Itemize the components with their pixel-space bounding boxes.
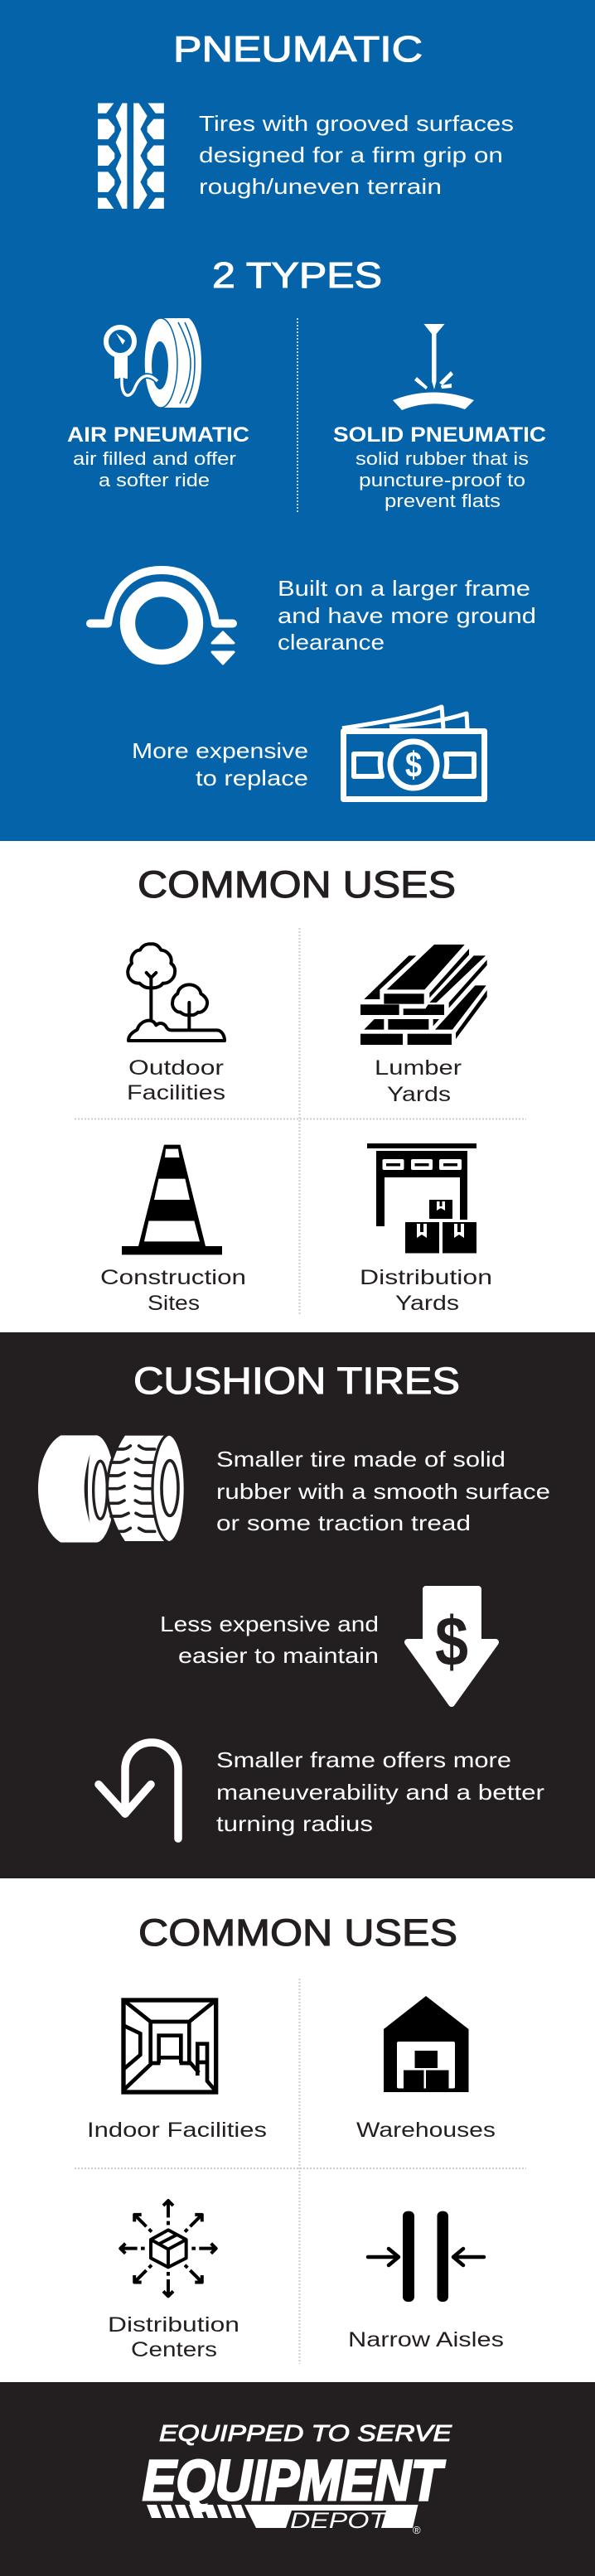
- label: outdoor facilities: Facilities: [127, 1081, 225, 1104]
- text: smaller tire: or some traction tread: [216, 1510, 471, 1535]
- text: built on a larger frame: clearance: [278, 630, 385, 655]
- text: smaller tire: Smaller tire made of solid: [216, 1447, 506, 1472]
- text: more expensive to replace: [132, 738, 308, 790]
- icon: ground clearance: [90, 570, 234, 665]
- tagline: EQUIPPED TO SERVE: [159, 2420, 452, 2446]
- icon: tire tread: [98, 103, 164, 209]
- icon: dollar down arrow: $: [435, 1602, 468, 1680]
- label: distribution yards: [360, 1266, 492, 1315]
- label: solid pneumatic: prevent flats: [385, 491, 501, 511]
- label: air pneumatic: a softer ride: [99, 470, 210, 491]
- label: construction sites: [100, 1266, 246, 1315]
- label: solid pneumatic: SOLID PNEUMATIC: [333, 423, 546, 447]
- label: distribution centers: Distribution: [108, 2313, 239, 2337]
- icon: lumber: [360, 945, 487, 1045]
- label: outdoor facilities: [127, 1056, 225, 1104]
- text: smaller frame: turning radius: [216, 1811, 373, 1836]
- icon: warehouse: [384, 1996, 469, 2092]
- icon: distribution yard: [367, 1143, 476, 1253]
- label: construction sites: Sites: [148, 1292, 200, 1315]
- text: built on a larger frame: [278, 576, 536, 655]
- label: lumber yards: [375, 1056, 462, 1106]
- label: solid pneumatic: solid rubber that is: [356, 448, 529, 469]
- label: air pneumatic: [67, 423, 249, 491]
- label: solid pneumatic: puncture-proof to: [359, 470, 525, 491]
- text: tires with grooved surfaces: Tires with grooved surfaces: [199, 111, 514, 136]
- logo: equipment depot: EQUIPMENT: [143, 2448, 445, 2512]
- logo: equipment depot: ®: [413, 2524, 421, 2536]
- text: smaller frame: [216, 1747, 544, 1836]
- label: distribution yards: Distribution: [360, 1266, 492, 1289]
- heading: common uses: COMMON USES: [138, 863, 456, 906]
- text: more expensive to replace: More expensive: [132, 738, 308, 763]
- label: solid pneumatic: [333, 423, 546, 511]
- text: built on a larger frame: Built on a larger frame: [278, 576, 530, 601]
- label: lumber yards: Lumber: [375, 1056, 462, 1080]
- icon: traffic cone: [122, 1145, 222, 1254]
- panel: footer: [0, 2382, 595, 2576]
- label: construction sites: Construction: [100, 1266, 246, 1289]
- icon: distribution center: [120, 2201, 216, 2296]
- label: lumber yards: Yards: [387, 1083, 451, 1106]
- icon: cushion tires: [38, 1429, 190, 1548]
- text: more expensive to replace: to replace: [196, 766, 308, 790]
- title: cushion tires: CUSHION TIRES: [133, 1360, 460, 1402]
- logo: equipment depot: DEPOT: [290, 2508, 389, 2533]
- icon: air gauge and tire: [106, 318, 201, 408]
- text: tires with grooved surfaces: [199, 111, 514, 199]
- text: tires with grooved surfaces: designed for a firm grip on: [199, 143, 503, 167]
- text: less expensive: easier to maintain: [178, 1643, 379, 1668]
- icon: indoor corridor: [123, 2000, 216, 2092]
- text: built on a larger frame: and have more ground: [278, 603, 536, 628]
- label: outdoor facilities: Outdoor: [128, 1056, 224, 1080]
- text: less expensive: Less expensive and: [160, 1612, 379, 1636]
- panel: common uses pneumatic: [0, 841, 595, 1332]
- panel: pneumatic: [0, 0, 595, 841]
- label: indoor facilities: Indoor Facilities: [87, 2119, 267, 2142]
- icon: cash: $: [405, 745, 422, 785]
- text: tires with grooved surfaces: rough/uneven terrain: [199, 174, 442, 199]
- label: narrow aisles: Narrow Aisles: [348, 2328, 504, 2351]
- icon: narrow aisles: [368, 2211, 484, 2302]
- icon: nail and solid tire: [393, 324, 474, 410]
- icon: dollar down arrow: [408, 1589, 496, 1704]
- icon: trees: [128, 944, 225, 1041]
- label: air pneumatic: AIR PNEUMATIC: [67, 423, 249, 447]
- heading: common uses: COMMON USES: [138, 1911, 457, 1954]
- label: warehouses: Warehouses: [356, 2119, 496, 2142]
- label: distribution centers: Centers: [131, 2338, 217, 2361]
- text: smaller tire: rubber with a smooth surface: [216, 1479, 550, 1504]
- icon: u-turn arrow: [99, 1742, 178, 1839]
- label: distribution yards: Yards: [395, 1292, 459, 1315]
- title: pneumatic: PNEUMATIC: [173, 29, 423, 70]
- panel: common uses cushion: [0, 1878, 595, 2382]
- panel: cushion tires: [0, 1332, 595, 1878]
- icon: cash: [342, 707, 484, 799]
- text: less expensive: [160, 1612, 379, 1668]
- text: smaller frame: Smaller frame offers more: [216, 1747, 511, 1772]
- logo: equipment depot: [143, 2448, 445, 2536]
- text: smaller tire: [216, 1447, 550, 1535]
- text: smaller frame: maneuverability and a better: [216, 1780, 544, 1805]
- heading: 2 types: 2 TYPES: [212, 255, 382, 296]
- label: air pneumatic: air filled and offer: [73, 448, 236, 469]
- label: distribution centers: [108, 2313, 239, 2361]
